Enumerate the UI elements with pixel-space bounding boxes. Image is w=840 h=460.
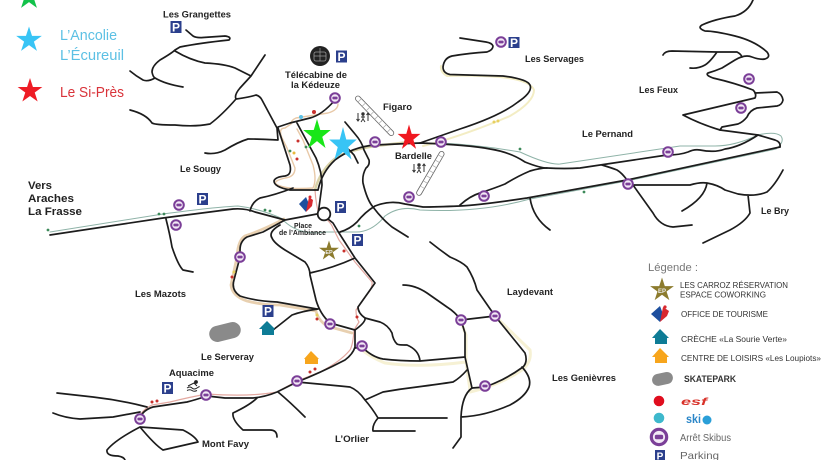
label: Vers Araches La Frasse: La Frasse bbox=[28, 206, 82, 218]
parking Les Grangettes: P bbox=[172, 20, 180, 34]
parking markers bbox=[162, 20, 520, 396]
label: L'Orlier: L’Orlier bbox=[335, 434, 369, 445]
label: Vers Araches La Frasse: Araches bbox=[28, 193, 74, 205]
legend: coworking bbox=[650, 278, 788, 300]
stop Les Servages bbox=[496, 37, 506, 47]
accommodation key bbox=[16, 0, 124, 102]
stop Le Serveray bbox=[325, 319, 335, 329]
icon: cable car bbox=[310, 46, 330, 66]
legend: tourist office bbox=[651, 305, 768, 322]
star: green on map bbox=[303, 119, 331, 148]
label: L'Écureuil: L’Écureuil bbox=[60, 47, 124, 64]
legend: esf bbox=[654, 396, 710, 408]
label: Aquacime: Aquacime bbox=[169, 368, 214, 379]
accommodation stars on map bbox=[303, 119, 420, 160]
icon: coworking star: EP bbox=[325, 250, 333, 256]
stop centre sud bbox=[357, 341, 367, 351]
legend: ski school bbox=[654, 412, 712, 426]
legend: crèche bbox=[652, 329, 788, 344]
label: Le Pernand: Le Pernand bbox=[582, 129, 633, 140]
parking Télécabine: P bbox=[337, 50, 346, 64]
legend heading: Légende : bbox=[648, 262, 698, 274]
legend: ski bus bbox=[651, 429, 731, 445]
stop Le Pernand east bbox=[663, 147, 673, 157]
label: Place de l'Ambiance bbox=[279, 223, 326, 237]
stop Le Bry bbox=[623, 179, 633, 189]
stop Laydevant east bbox=[490, 311, 500, 321]
label: Les Servages: Les Servages bbox=[525, 54, 584, 65]
stop Laydevant west bbox=[456, 315, 466, 325]
label: Télécabine de la Kédeuze: Télécabine de bbox=[285, 70, 347, 81]
label: Place de l'Ambiance: de l’Ambiance bbox=[279, 230, 326, 237]
label: Vers Araches La Frasse: Vers bbox=[28, 180, 52, 192]
label: Le Serveray: Le Serveray bbox=[201, 352, 255, 363]
stop Les Mazots bbox=[235, 252, 245, 262]
legend: centre de loisirs: CENTRE DE LOISIRS «Les Loupiots» bbox=[681, 354, 822, 363]
legend: coworking: EP bbox=[658, 289, 666, 295]
icon: coworking star bbox=[319, 240, 339, 259]
star: blue on map bbox=[329, 127, 357, 160]
icon: centre de loisirs bbox=[304, 351, 319, 364]
parking Le Sougy: P bbox=[198, 192, 207, 206]
label: Laydevant: Laydevant bbox=[507, 287, 554, 298]
parking Aquacime: P bbox=[163, 382, 172, 396]
star: blue accommodation bbox=[16, 26, 42, 51]
ski bus stops bbox=[135, 37, 754, 424]
stop route d'Araches south bbox=[171, 220, 181, 230]
roundabout bbox=[318, 208, 330, 220]
legend: esf: esf bbox=[681, 397, 710, 408]
star: red accommodation bbox=[18, 78, 42, 102]
label: Vers Araches La Frasse bbox=[28, 180, 82, 218]
stop Aquacime bbox=[201, 390, 211, 400]
label: Le Si-Près: Le Si-Près bbox=[60, 85, 124, 101]
icon: swimming bbox=[187, 381, 199, 391]
legend: skatepark: SKATEPARK bbox=[684, 374, 736, 384]
parking centre: P bbox=[336, 200, 345, 214]
star: red on map bbox=[398, 124, 420, 149]
legend: coworking: LES CARROZ RÉSERVATION bbox=[680, 281, 788, 290]
icon: walkers Figaro bbox=[356, 113, 370, 122]
legend: ski school: ski bbox=[686, 412, 701, 426]
parking Les Servages: P bbox=[510, 36, 518, 50]
stop Télécabine bbox=[330, 93, 340, 103]
lift: Figaro bbox=[354, 95, 395, 137]
label: Figaro: Figaro bbox=[383, 102, 412, 113]
legend panel bbox=[648, 262, 822, 460]
star: green accommodation bbox=[16, 0, 42, 8]
label: Place de l'Ambiance: Place bbox=[294, 223, 312, 230]
stop Les Feux north bbox=[744, 74, 754, 84]
icon: walkers Bardelle bbox=[412, 164, 426, 173]
label: Les Grangettes: Les Grangettes bbox=[163, 10, 231, 20]
label: Mont Favy: Mont Favy bbox=[202, 439, 250, 450]
legend: centre de loisirs bbox=[652, 348, 822, 363]
label: Le Sougy: Le Sougy bbox=[180, 164, 222, 175]
legend: tourist office: OFFICE DE TOURISME bbox=[681, 310, 768, 319]
label: Bardelle: Bardelle bbox=[395, 151, 432, 162]
parking Les Mazots: P bbox=[264, 304, 272, 318]
label: L'Ancolie: L’Ancolie bbox=[60, 28, 117, 44]
label: Télécabine de la Kédeuze: la Kédeuze bbox=[291, 80, 340, 91]
icon: skatepark bbox=[208, 320, 242, 344]
stop L'Orlier bbox=[292, 376, 302, 386]
stop Les Genièvres bbox=[480, 381, 490, 391]
legend: ski bus: Arrêt Skibus bbox=[680, 432, 731, 444]
stop Les Feux south bbox=[736, 103, 746, 113]
legend: parking bbox=[655, 450, 719, 460]
legend: crèche: CRÈCHE «La Sourie Verte» bbox=[681, 335, 788, 344]
icon: crèche bbox=[259, 321, 275, 335]
stop Le Pernand west bbox=[436, 137, 446, 147]
route overlays bbox=[50, 66, 782, 416]
legend: skatepark bbox=[651, 371, 736, 387]
stop Figaro bbox=[370, 137, 380, 147]
stop Bardelle bbox=[404, 192, 414, 202]
label: Télécabine de la Kédeuze bbox=[285, 70, 347, 91]
direction arrows bbox=[47, 110, 585, 404]
legend: coworking: ESPACE COWORKING bbox=[680, 290, 766, 300]
parking Place de l'Ambiance: P bbox=[353, 234, 362, 248]
label: Les Feux: Les Feux bbox=[639, 85, 679, 96]
stop route basse bbox=[479, 191, 489, 201]
label: Les Mazots: Les Mazots bbox=[135, 289, 186, 300]
stop Mont Favy bbox=[135, 414, 145, 424]
label: Le Bry: Le Bry bbox=[761, 206, 790, 217]
stop route d'Araches north bbox=[174, 200, 184, 210]
label: Les Genièvres: Les Genièvres bbox=[552, 373, 616, 384]
icon: tourist office bbox=[299, 196, 313, 212]
lift: Bardelle bbox=[416, 150, 445, 196]
